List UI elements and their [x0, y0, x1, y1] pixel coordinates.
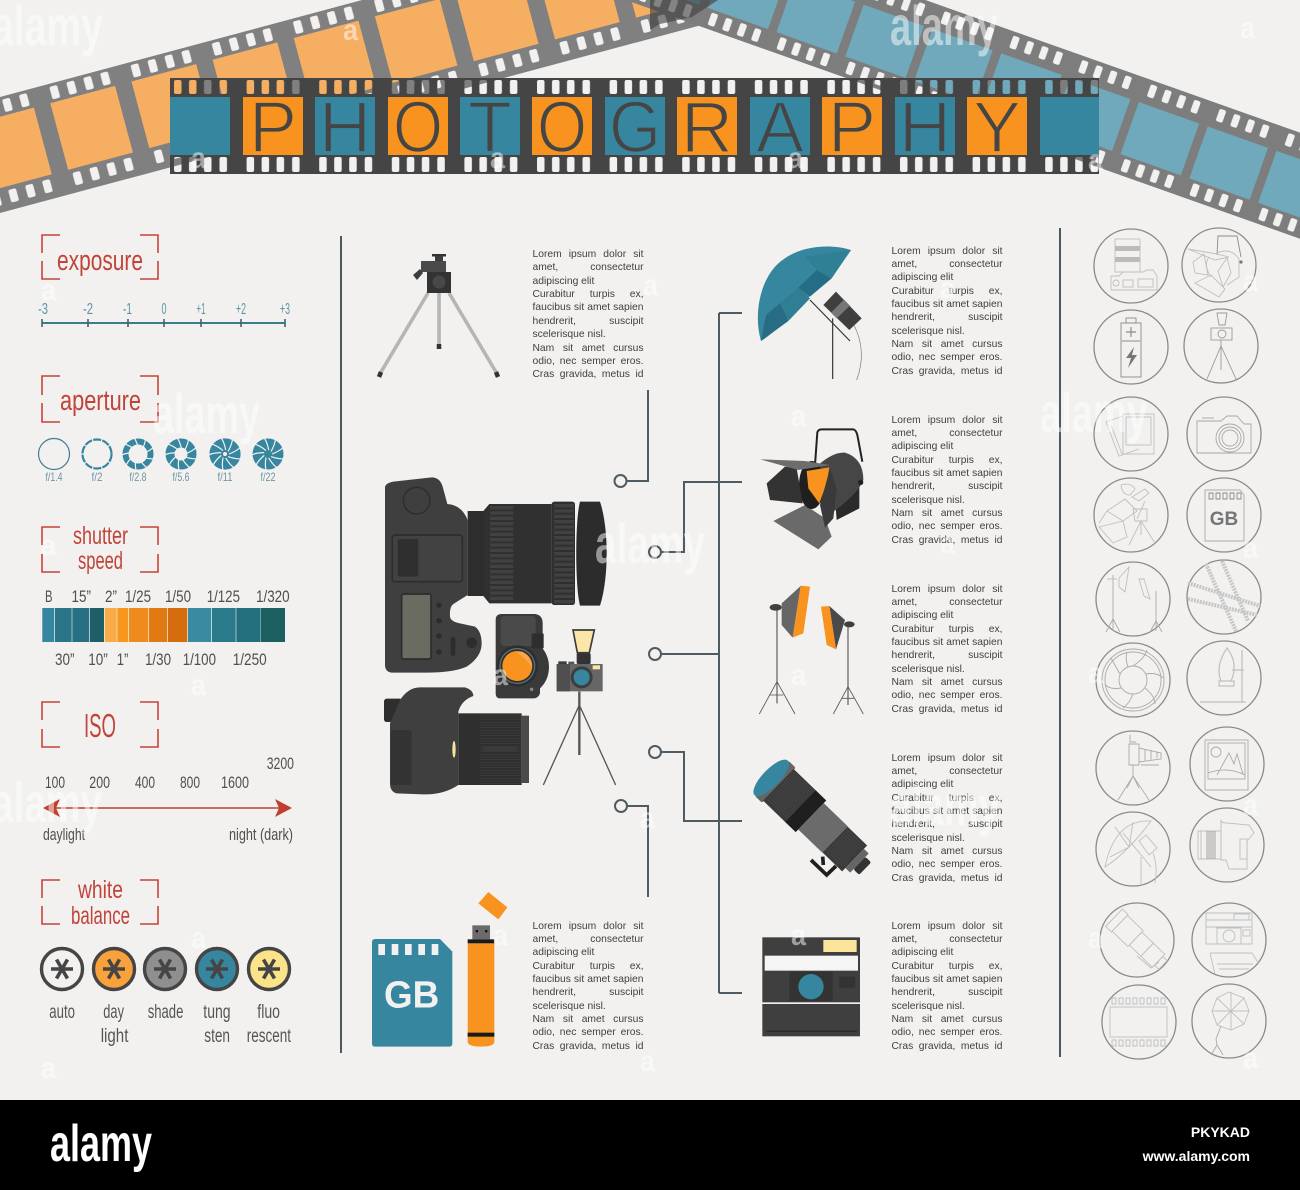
arrow end labels: daylight — [43, 826, 85, 844]
text block: instant camera: hendrerit, suscipit — [892, 987, 1002, 998]
icon: iris — [1096, 643, 1170, 717]
text block: telephoto lens: Cras gravida, metus id — [892, 873, 1002, 884]
text block: spotlight: odio, nec semper eros. — [892, 521, 1002, 532]
text block: telephoto lens: Curabitur turpis ex, — [892, 793, 1002, 804]
exposure scale: -2 — [83, 301, 93, 318]
title: film strip with PHOTOGRAPHY: Y — [973, 88, 1021, 168]
icon: crossed film strips — [1187, 560, 1261, 634]
text block: instant camera: Cras gravida, metus id — [892, 1041, 1002, 1052]
white balance labels: auto — [49, 1002, 75, 1023]
text block: telephoto lens: faucibus sit amet sapien — [892, 806, 1002, 817]
spotlight — [760, 429, 863, 549]
title: film strip with PHOTOGRAPHY: G — [609, 88, 661, 168]
title: film strip with PHOTOGRAPHY: R — [681, 88, 733, 168]
text block: spotlight: Nam sit amet cursus — [892, 508, 1002, 519]
shutter speed labels: 30” — [55, 650, 75, 669]
watermarks: a — [41, 274, 56, 307]
footer: alamy bar: www.alamy.com — [1142, 1148, 1250, 1164]
shutter speed labels: 1/100 — [183, 650, 216, 669]
film strip: blue, right roof — [599, 0, 1300, 248]
white balance labels: sten — [204, 1026, 230, 1047]
watermarks: a — [940, 272, 955, 305]
ISO labels — [45, 754, 294, 792]
aperture diagrams: f/1.4 — [46, 470, 63, 484]
icon: camera with flash on tripod — [1184, 309, 1258, 383]
exposure scale: -3 — [38, 301, 48, 318]
text block: tripod: scelerisque nisl. — [532, 329, 606, 340]
footer: alamy bar: PKYKAD — [1191, 1124, 1250, 1140]
panel: outline icon grid — [1094, 228, 1266, 1059]
white balance labels: rescent — [247, 1026, 292, 1047]
shutter speed labels: B — [45, 587, 52, 606]
icon: spotlight outline — [1182, 228, 1256, 302]
text block: telephoto lens: scelerisque nisl. — [892, 833, 965, 844]
watermarks: a — [490, 142, 505, 175]
watermarks: a — [791, 659, 806, 692]
watermarks: a — [640, 802, 655, 835]
watermarks: a — [791, 919, 806, 952]
watermarks: a — [191, 142, 206, 175]
heading: shutter speed: speed — [78, 547, 123, 575]
shutter speed bar — [42, 608, 285, 642]
watermarks: alamy — [595, 512, 705, 575]
title: film strip with PHOTOGRAPHY: P — [249, 88, 297, 168]
text block: instant camera: amet, consectetur — [892, 934, 1002, 945]
watermarks: a — [788, 142, 803, 175]
white balance labels: tung — [203, 1002, 231, 1023]
text block: instant camera: odio, nec semper eros. — [892, 1027, 1002, 1038]
text block: umbrella: Curabitur turpis ex, — [892, 286, 1002, 297]
heading: shutter speed: shutter — [73, 522, 128, 550]
text block: tripod: Nam sit amet cursus — [532, 343, 644, 354]
text block: umbrella: Lorem ipsum dolor sit — [892, 246, 1002, 256]
illustration: umbrella and spotlight — [758, 246, 863, 549]
text block: memory card — [532, 920, 644, 1052]
USB drive — [468, 892, 507, 1047]
icon: softbox lamp — [1187, 641, 1261, 715]
text block: umbrella: scelerisque nisl. — [892, 326, 965, 337]
icon: film frame — [1102, 985, 1176, 1059]
text block: softboxes: Cras gravida, metus id — [892, 704, 1002, 715]
illustration: memory card and USB drive — [372, 892, 507, 1047]
heading: aperture — [42, 376, 158, 422]
text block: tripod: Lorem ipsum dolor sit — [532, 249, 644, 260]
umbrella light — [758, 246, 862, 380]
text block: memory card: Nam sit amet cursus — [532, 1014, 644, 1025]
white balance labels: day — [103, 1002, 124, 1023]
watermarks: a — [1243, 1042, 1258, 1075]
shutter speed labels: 15” — [72, 587, 91, 606]
film strip: orange, left roof — [0, 0, 724, 225]
white balance icons — [42, 948, 290, 990]
text block: softboxes: amet, consectetur — [892, 597, 1002, 608]
heading: white balance: balance — [71, 902, 130, 930]
title: film strip with PHOTOGRAPHY: A — [756, 88, 804, 168]
icon: battery — [1094, 310, 1168, 384]
title: film strip with PHOTOGRAPHY — [170, 78, 1099, 174]
text block: umbrella: Nam sit amet cursus — [892, 339, 1002, 350]
text block: telephoto lens: odio, nec semper eros. — [892, 859, 1002, 870]
white balance labels: fluo — [257, 1002, 280, 1023]
text block: instant camera: faucibus sit amet sapien — [892, 974, 1002, 985]
watermarks: a — [1243, 532, 1258, 565]
exposure scale — [38, 301, 290, 327]
text block: umbrella — [892, 246, 1002, 377]
text block: spotlight: amet, consectetur — [892, 428, 1002, 439]
heading: ISO — [42, 702, 158, 747]
text block: instant camera — [892, 920, 1002, 1052]
arrow end labels: night (dark) — [229, 826, 293, 844]
exposure scale: -1 — [123, 301, 132, 318]
exposure scale: +1 — [196, 301, 206, 318]
text block: softboxes: Curabitur turpis ex, — [892, 624, 1002, 635]
icon: umbrella on stand — [1192, 984, 1266, 1058]
watermarks: a — [640, 1045, 655, 1078]
heading: shutter speed — [42, 522, 158, 575]
heading: ISO: ISO — [84, 707, 116, 744]
icon: instant photo — [1190, 727, 1264, 801]
text block: telephoto lens — [892, 752, 1002, 884]
watermarks: alamy — [890, 774, 1000, 837]
text block: tripod: faucibus sit amet sapien — [532, 302, 644, 313]
text block: softboxes: Lorem ipsum dolor sit — [892, 584, 1002, 594]
watermarks: a — [1240, 12, 1255, 45]
icon: tripod — [379, 254, 498, 377]
shutter speed labels: 1/25 — [125, 587, 151, 606]
camera side view — [384, 687, 529, 794]
text block: memory card: Lorem ipsum dolor sit — [532, 920, 644, 932]
text block: tripod: Cras gravida, metus id — [532, 369, 644, 380]
watermarks: a — [1243, 265, 1258, 298]
watermarks: a — [940, 527, 955, 560]
text block: instant camera: Curabitur turpis ex, — [892, 961, 1002, 972]
title: film strip with PHOTOGRAPHY: O — [393, 88, 443, 168]
watermarks: alamy — [153, 382, 260, 445]
footer: alamy bar: alamy — [50, 1115, 152, 1173]
icon: memory card: GB — [1210, 509, 1238, 530]
ISO labels: 800 — [180, 773, 200, 792]
shutter speed labels: 2” — [105, 587, 117, 606]
icon: DSLR side view — [1190, 808, 1264, 882]
panel: aperture — [38, 376, 284, 484]
icon: instant camera outline — [1192, 903, 1266, 977]
text block: softboxes: hendrerit, suscipit — [892, 650, 1002, 661]
icon: photographs — [1094, 397, 1168, 471]
watermarks: a — [343, 14, 358, 47]
title: film strip with PHOTOGRAPHY: T — [468, 88, 512, 168]
telephoto lens — [748, 754, 882, 886]
watermarks: a — [41, 529, 56, 562]
text block: umbrella: hendrerit, suscipit — [892, 312, 1002, 323]
panel: white balance — [42, 876, 292, 1047]
watermarks: a — [493, 659, 508, 692]
text block: instant camera: scelerisque nisl. — [892, 1001, 965, 1012]
watermarks: a — [191, 669, 206, 702]
memory card: GB — [384, 974, 439, 1016]
softboxes on stands — [759, 586, 863, 714]
text block: spotlight: adipiscing elit — [892, 441, 953, 452]
heading: white balance — [42, 876, 158, 930]
white balance labels: shade — [148, 1002, 183, 1023]
text block: telephoto lens: adipiscing elit — [892, 779, 953, 790]
footer: alamy bar — [0, 1100, 1300, 1190]
illustration: softboxes, tele lens, instant camera — [748, 586, 882, 1036]
instant camera — [762, 937, 860, 1036]
text block: memory card: odio, nec semper eros. — [532, 1027, 644, 1038]
text block: spotlight: faucibus sit amet sapien — [892, 468, 1002, 479]
watermarks: a — [493, 919, 508, 952]
watermarks: a — [1088, 657, 1103, 690]
panel: ISO — [42, 702, 294, 844]
icon: bellows camera — [1096, 731, 1170, 805]
text block: instant camera: Lorem ipsum dolor sit — [892, 920, 1002, 932]
aperture diagrams: f/22 — [260, 470, 276, 484]
illustration group: cameras — [384, 477, 616, 794]
text block: spotlight: Curabitur turpis ex, — [892, 455, 1002, 466]
ISO labels: 1600 — [221, 773, 249, 792]
connector lines — [614, 313, 742, 993]
aperture diagrams: f/11 — [218, 470, 233, 484]
icon: photographer — [1094, 478, 1168, 552]
text block: spotlight: scelerisque nisl. — [892, 495, 965, 506]
ISO labels: 100 — [45, 773, 65, 792]
text block: tripod: hendrerit, suscipit — [532, 316, 644, 327]
text block: memory card: adipiscing elit — [532, 947, 594, 958]
heading: exposure: exposure — [57, 245, 143, 277]
text block: memory card: Cras gravida, metus id — [532, 1041, 644, 1052]
text block: umbrella: Cras gravida, metus id — [892, 366, 1002, 377]
compact camera with flash on tripod — [543, 630, 616, 785]
text block: memory card: Curabitur turpis ex, — [532, 961, 644, 972]
camera top view with lens — [385, 477, 607, 673]
aperture diagrams — [38, 437, 284, 484]
text block: telephoto lens: hendrerit, suscipit — [892, 819, 1002, 830]
text block: telephoto lens: amet, consectetur — [892, 766, 1002, 777]
text block: memory card: amet, consectetur — [532, 934, 644, 945]
exposure scale: +2 — [236, 301, 246, 318]
shutter speed labels: 1/50 — [165, 587, 191, 606]
text block: spotlight: hendrerit, suscipit — [892, 481, 1002, 492]
shutter speed labels: 1/250 — [233, 650, 267, 669]
text block: umbrella: odio, nec semper eros. — [892, 352, 1002, 363]
heading: exposure — [42, 235, 158, 279]
text block: softboxes: adipiscing elit — [892, 610, 953, 621]
text block: memory card: hendrerit, suscipit — [532, 987, 644, 998]
text block: softboxes: scelerisque nisl. — [892, 664, 965, 675]
arrow: daylight to night — [43, 799, 292, 817]
aperture diagrams: f/5.6 — [172, 470, 190, 484]
ISO labels: 400 — [135, 773, 155, 792]
heading: white balance: white — [77, 876, 123, 904]
title: film strip with PHOTOGRAPHY: H — [319, 88, 371, 168]
watermarks: alamy — [1040, 381, 1148, 444]
panel: exposure — [38, 235, 290, 327]
camera front view — [496, 614, 549, 698]
text block: tripod: adipiscing elit — [532, 276, 594, 287]
text block: spotlight: Lorem ipsum dolor sit — [892, 414, 1002, 426]
text block: softboxes — [892, 584, 1002, 715]
text block: instant camera: Nam sit amet cursus — [892, 1014, 1002, 1025]
arrow end labels — [43, 826, 293, 844]
text block: umbrella: amet, consectetur — [892, 259, 1002, 270]
icon: memory card — [1187, 478, 1261, 552]
aperture diagrams: f/2 — [92, 470, 103, 484]
watermarks: a — [643, 269, 658, 302]
text block: tripod: Curabitur turpis ex, — [532, 289, 644, 300]
shutter speed labels: 10” — [88, 650, 108, 669]
text block: softboxes: faucibus sit amet sapien — [892, 637, 1002, 648]
watermarks: a — [1088, 144, 1103, 177]
icon: telephoto lens outline — [1100, 903, 1174, 977]
exposure scale: +3 — [280, 301, 290, 318]
text block: umbrella: adipiscing elit — [892, 272, 953, 283]
ISO labels: 3200 — [267, 754, 294, 773]
icon: softboxes — [1096, 562, 1170, 636]
watermarks: a — [1243, 789, 1258, 822]
title: film strip with PHOTOGRAPHY: O — [537, 88, 587, 168]
text block: softboxes: odio, nec semper eros. — [892, 690, 1002, 701]
text block: umbrella: faucibus sit amet sapien — [892, 299, 1002, 310]
memory card — [372, 939, 452, 1047]
shutter speed labels: 1” — [117, 650, 129, 669]
text block: instant camera: adipiscing elit — [892, 947, 953, 958]
aperture diagrams: f/2.8 — [130, 470, 147, 484]
shutter speed labels: 1/125 — [207, 587, 240, 606]
shutter speed labels — [45, 587, 290, 669]
watermarks: a — [191, 922, 206, 955]
text block: spotlight: Cras gravida, metus id — [892, 535, 1002, 546]
icon: mirrorless camera — [1187, 397, 1261, 471]
text block: memory card: scelerisque nisl. — [532, 1001, 606, 1012]
film strip overlap at apex — [650, 0, 718, 30]
panel: shutter speed — [42, 522, 290, 669]
text block: telephoto lens: Lorem ipsum dolor sit — [892, 752, 1002, 764]
text block: tripod: amet, consectetur — [532, 262, 644, 273]
exposure scale: 0 — [162, 301, 167, 318]
watermarks: a — [41, 1052, 56, 1085]
title: film strip with PHOTOGRAPHY: H — [899, 88, 951, 168]
white balance labels: light — [101, 1026, 129, 1047]
icon: umbrella outline — [1096, 812, 1170, 886]
shutter speed labels: 1/30 — [145, 650, 171, 669]
text block: telephoto lens: Nam sit amet cursus — [892, 846, 1002, 857]
shutter speed labels: 1/320 — [256, 587, 290, 606]
ISO labels: 200 — [89, 773, 110, 792]
text block: spotlight — [892, 414, 1002, 546]
text block: tripod — [532, 249, 644, 380]
text block: softboxes: Nam sit amet cursus — [892, 677, 1002, 688]
white balance labels — [49, 1002, 292, 1047]
watermarks: a — [1088, 922, 1103, 955]
text block: memory card: faucibus sit amet sapien — [532, 974, 644, 985]
watermarks: a — [791, 400, 806, 433]
title: film strip with PHOTOGRAPHY: P — [828, 88, 876, 168]
text block: tripod: odio, nec semper eros. — [532, 356, 644, 367]
icon: camera with lens — [1094, 229, 1168, 303]
heading: aperture: aperture — [60, 385, 141, 417]
